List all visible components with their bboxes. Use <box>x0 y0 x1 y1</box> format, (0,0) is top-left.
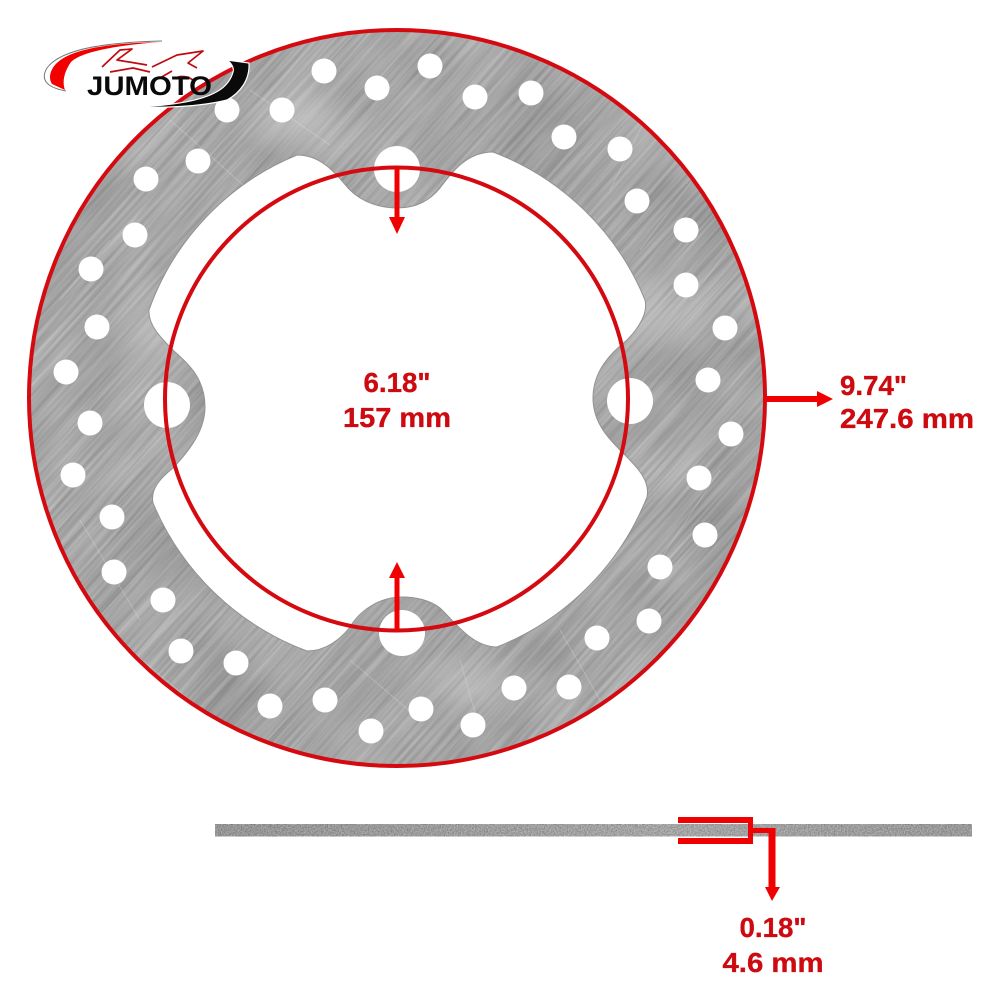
brake disc front view <box>31 32 763 764</box>
disc steel surface <box>31 32 763 764</box>
outer diameter ring <box>29 30 765 766</box>
thickness bracket <box>678 817 753 844</box>
logo: swoosh outline <box>44 41 162 91</box>
logo: wordmark: JUMOTO <box>87 71 212 101</box>
mounting holes <box>144 146 653 656</box>
arrow: inner diameter bottom <box>389 562 405 630</box>
label: inner diameter: 6.18" <box>364 367 430 398</box>
arrow: outer diameter <box>766 391 833 407</box>
brand logo <box>44 41 249 107</box>
logo: motorcycle rider line art <box>102 49 203 80</box>
label: thickness: 4.6 mm <box>722 947 824 978</box>
label: outer diameter: 9.74" <box>840 370 907 401</box>
label: outer diameter <box>840 370 974 434</box>
label: thickness <box>722 912 824 978</box>
label: outer diameter: 247.6 mm <box>840 403 974 434</box>
arrow: inner diameter top <box>389 168 405 234</box>
arrow: thickness leader <box>753 828 780 901</box>
label: inner diameter <box>343 367 451 433</box>
brake disc side profile <box>215 824 972 836</box>
inner diameter ring <box>165 168 628 630</box>
label: thickness: 0.18" <box>740 912 806 943</box>
central four-lobed cutout <box>149 152 648 651</box>
ventilation holes <box>54 54 744 744</box>
logo: red swoosh <box>50 42 160 90</box>
label: inner diameter: 157 mm <box>343 402 451 433</box>
logo: black swoosh <box>133 60 249 107</box>
